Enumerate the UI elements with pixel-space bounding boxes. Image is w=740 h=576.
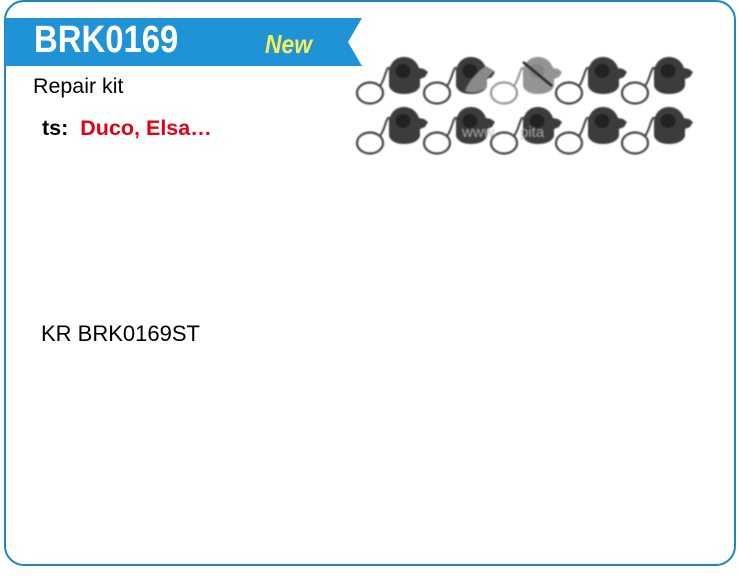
text: part reference: KR BRK0169ST <box>41 321 200 346</box>
text: product type: Repair kit <box>33 75 123 98</box>
cap row 1 <box>357 57 693 104</box>
heading: product code: BRK0169 <box>34 19 178 61</box>
banner ribbon <box>5 18 362 66</box>
badge: new: New <box>265 29 312 59</box>
text: fits label and brands: ts: Duco, Elsa… <box>42 116 212 140</box>
product photo: ten caps with rings: pita <box>520 124 545 141</box>
cap row 2 <box>357 107 693 154</box>
product photo: ten caps with rings <box>354 56 694 156</box>
watermark: www. <box>461 124 498 141</box>
